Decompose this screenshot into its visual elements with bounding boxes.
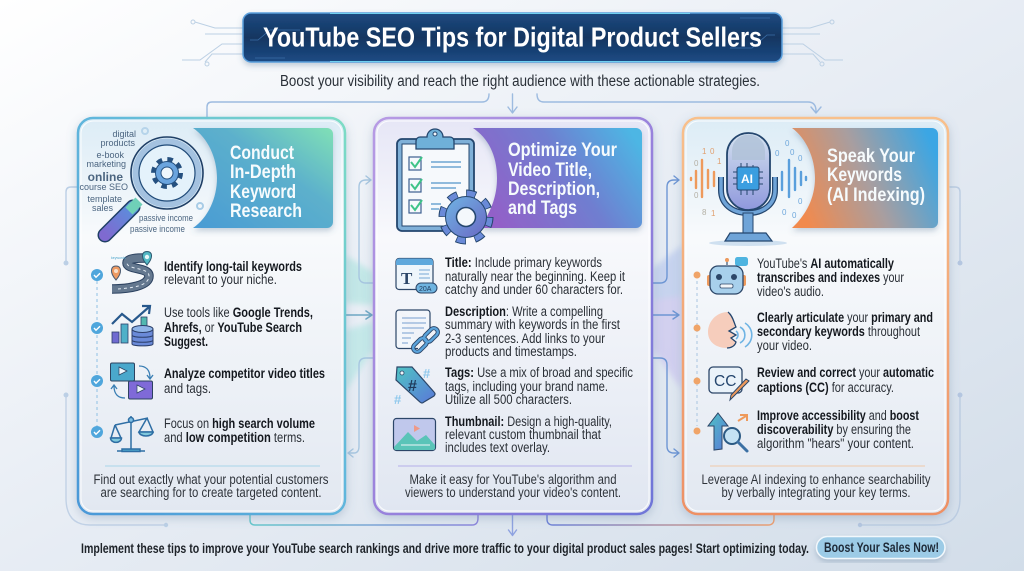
panel 3 heading ribbon: Speak Your [827, 145, 915, 167]
panel 1 heading ribbon [193, 128, 333, 228]
icon: closed captions with pencil [709, 367, 749, 400]
icon: AI microphone with sound waves: 0 [798, 197, 803, 206]
icon: winding road [111, 252, 152, 289]
tips text: panel 1: and tags. [164, 381, 211, 396]
panel 1 heading ribbon: Research [230, 200, 302, 222]
icon: hashtag price tag: # [423, 366, 431, 381]
footer call to action text: Implement these tips to improve your YouTube search rankings and drive more traffic to your digital product sales pages! Start optimizing today. [81, 540, 809, 556]
tips text: panel 2: tags, including your brand name. [445, 379, 608, 394]
icon: title card: T [401, 269, 413, 288]
icon: hashtag price tag: # [408, 378, 417, 395]
light streaks between panel 1 and 2 [345, 255, 373, 392]
tips text: panel 1: and low competition terms. [164, 430, 305, 445]
gutter arrows between panels 2 and 3 [653, 176, 679, 457]
icon: speaking head [708, 312, 752, 348]
icon: hashtag price tag: # [394, 392, 402, 407]
keyword word cloud: passive income [139, 213, 193, 223]
icon: AI microphone with sound waves: 0 [790, 148, 795, 157]
tips text: panel 3: algorithm "hears" your content. [757, 436, 914, 451]
panel 2 summary: Make it easy for YouTube's algorithm and [410, 472, 616, 487]
tips text: panel 2: includes text overlay. [445, 440, 550, 455]
tips text: panel 1: relevant to your niche. [164, 272, 277, 287]
icon: magnifying glass with gear [105, 137, 203, 235]
icon: competitor videos [110, 363, 153, 399]
icon: upward arrow and magnifier [708, 413, 747, 451]
keyword word cloud: products [100, 138, 135, 148]
keyword word cloud: course SEO [79, 182, 128, 192]
panel 2: title, description, tags [374, 118, 652, 514]
panel 1 summary [94, 472, 329, 500]
panel 1: keyword research [78, 118, 345, 514]
panel 2 heading ribbon: Description, [508, 178, 600, 200]
icon: AI microphone with sound waves: AI [741, 172, 753, 186]
panel 3 heading ribbon: Keywords [827, 164, 902, 186]
tips text: panel 3: Review and correct your automatic [757, 365, 934, 380]
subtitle: Boost your visibility and reach the right audience with these actionable strategies. [280, 73, 760, 90]
light streaks between panel 2 and 3 [653, 245, 682, 390]
button: boost your sales: Boost Your Sales Now! [824, 539, 939, 555]
icon: trend chart and database [112, 306, 153, 346]
circuit decoration beside title [182, 20, 843, 66]
keyword word cloud: e-book [96, 150, 124, 160]
keyword word cloud: marketing [86, 159, 126, 169]
icon: AI microphone with sound waves: 0 [775, 149, 780, 158]
icon: robot [707, 257, 748, 294]
button: boost your sales [816, 536, 945, 558]
tips text: panel 1 [164, 259, 325, 445]
title: YouTube SEO Tips for Digital Product Sellers [263, 22, 762, 52]
panel 1 heading ribbon: Conduct [230, 142, 294, 164]
tips text: panel 2: Description: Write a compelling [445, 304, 603, 319]
panel 2 summary [405, 472, 621, 500]
tips text: panel 2: 2-3 sentences. Add links to your [445, 331, 605, 346]
panel 3 summary: Leverage AI indexing to enhance searchability [702, 472, 931, 487]
icon: AI microphone with sound waves: 0 [710, 147, 715, 156]
tips text: panel 1: Analyze competitor video titles [164, 366, 325, 381]
panel 2 heading ribbon: Optimize Your [508, 139, 617, 161]
panel 3: AI indexing [683, 118, 948, 514]
icon: AI microphone with sound waves: 0 [694, 159, 699, 168]
timeline dots [694, 272, 700, 434]
keyword word cloud: passive income [130, 224, 185, 234]
tips text: panel 1: Focus on high search volume [164, 416, 315, 431]
panel 1 frame [78, 118, 345, 514]
panel 3 frame [683, 118, 948, 514]
panel 1 summary: Find out exactly what your potential customers [94, 472, 329, 487]
tips text: panel 2: Utilize all 500 characters. [445, 392, 572, 407]
icon: title card: 20A [419, 286, 432, 293]
tips text: panel 3: your video. [757, 338, 812, 353]
tips text: panel 3: discoverability by ensuring the [757, 422, 911, 437]
tips text: panel 2: catchy and under 60 characters for. [445, 282, 623, 297]
panel 1 heading ribbon: Keyword [230, 181, 296, 203]
tips text: panel 2: Thumbnail: Design a high-quality, [445, 414, 612, 429]
icon: AI microphone with sound waves: 8 [702, 208, 707, 217]
icon: AI microphone with sound waves [691, 133, 806, 246]
icon: AI microphone with sound waves: 0 [782, 208, 787, 217]
tips text: panel 3 [757, 256, 934, 451]
keyword word cloud: sales [92, 203, 113, 213]
tips text: panel 1: Suggest. [164, 334, 208, 349]
title banner [243, 13, 782, 62]
tips text: panel 2: products and timestamps. [445, 344, 577, 359]
panel 2 frame [374, 118, 652, 514]
icon: winding road: keywords [111, 256, 126, 260]
gutter arrows between panels 1 and 2 [345, 176, 373, 457]
tips text: panel 2: naturally near the beginning. Keep it [445, 269, 625, 284]
tips text: panel 1: Use tools like Google Trends, [164, 305, 313, 320]
tips text: panel 3: Clearly articulate your primary and [757, 310, 933, 325]
icon: AI microphone with sound waves: 0 [798, 154, 803, 163]
panel 2 summary: viewers to understand your video's content. [405, 485, 621, 500]
icon: hashtag price tag [394, 366, 435, 407]
tips text: panel 1: Identify long-tail keywords [164, 259, 302, 274]
keyword word cloud: template [87, 194, 122, 204]
tips text: panel 2: Title: Include primary keywords [445, 255, 602, 270]
timeline with check marks [91, 269, 103, 438]
tips text: panel 3: captions (CC) for accuracy. [757, 380, 894, 395]
panel 2 heading ribbon [473, 128, 642, 228]
tips text: panel 2 [445, 255, 633, 455]
panel 2 heading ribbon: and Tags [508, 197, 577, 219]
icon: title card [396, 258, 437, 293]
icon: AI microphone with sound waves: 0 [792, 211, 797, 220]
tips text: panel 1: Ahrefs, or YouTube Search [164, 320, 302, 335]
icon: AI microphone with sound waves: 1 [711, 209, 716, 218]
icon: AI microphone with sound waves: 1 [702, 147, 707, 156]
tips text: panel 3: transcribes and indexes your [757, 270, 904, 285]
icon: closed captions with pencil: CC [714, 373, 736, 390]
keyword word cloud: digital [112, 129, 136, 139]
tips text: panel 2: Tags: Use a mix of broad and specific [445, 365, 633, 380]
bottom connector lines [64, 187, 962, 536]
panel 3 heading ribbon [792, 128, 938, 228]
icon: AI microphone with sound waves: 0 [785, 139, 790, 148]
top connector arrows [207, 94, 821, 117]
icon: thumbnail image [394, 418, 436, 450]
tips text: panel 2: relevant custom thumbnail that [445, 427, 601, 442]
panel 1 heading ribbon: In-Depth [230, 161, 296, 183]
panel 3 heading ribbon: (AI Indexing) [827, 184, 925, 206]
icon: clipboard checklist with gear [397, 129, 489, 240]
tips text: panel 3: Improve accessibility and boost [757, 408, 919, 423]
panel 2 heading ribbon: Video Title, [508, 159, 592, 181]
tips text: panel 3: secondary keywords throughout [757, 324, 920, 339]
icon: AI microphone with sound waves: 0 [694, 191, 699, 200]
icon: description document with link [396, 310, 439, 353]
tips text: panel 2: summary with keywords in the first [445, 317, 620, 332]
panel 3 summary: by verbally integrating your key terms. [722, 485, 910, 500]
keyword word cloud [79, 128, 203, 234]
tips text: panel 3: video's audio. [757, 284, 824, 299]
panel 1 summary: are searching for to create targeted content. [100, 485, 322, 500]
tips text: panel 3: YouTube's AI automatically [757, 256, 894, 271]
panel 3 summary [702, 472, 931, 500]
keyword word cloud: online [88, 170, 123, 184]
icon: AI microphone with sound waves: 1 [717, 157, 722, 166]
icon: balance scale [110, 416, 153, 452]
